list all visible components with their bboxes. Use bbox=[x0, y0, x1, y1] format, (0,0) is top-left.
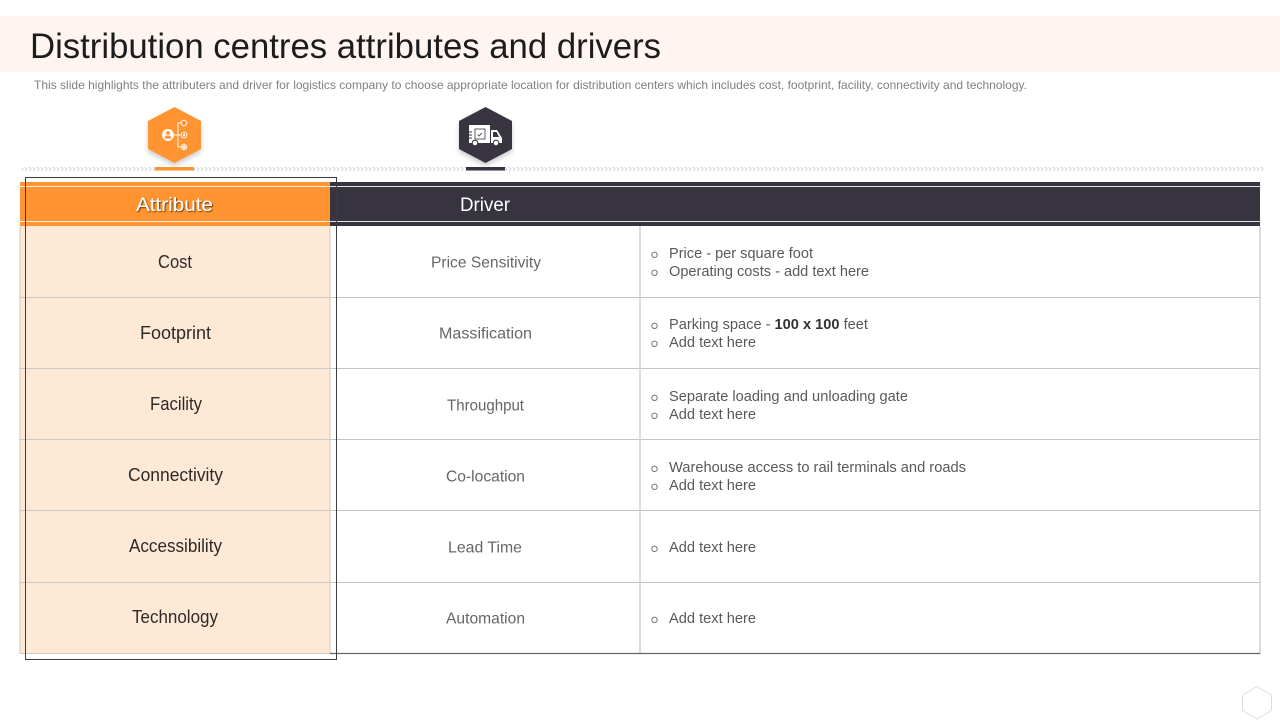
panel: attribute column bbox=[20, 226, 330, 654]
attribute: Facility: Facility bbox=[150, 394, 202, 414]
row: Accessibility bbox=[129, 536, 756, 556]
details: Connectivity: Warehouse access to rail terminals and roads bbox=[669, 460, 966, 476]
driver: Automation: Automation bbox=[446, 610, 525, 628]
row: Connectivity bbox=[128, 460, 966, 494]
details: Cost: Price - per square foot bbox=[669, 246, 813, 262]
icon: attribute hexagon bbox=[148, 107, 201, 163]
driver: Co-location: Co-location bbox=[446, 468, 525, 486]
header: Driver: Driver bbox=[460, 195, 511, 216]
details: Footprint bbox=[652, 317, 868, 351]
details: Cost bbox=[652, 246, 869, 280]
row: Facility bbox=[150, 389, 908, 423]
title band bbox=[0, 16, 1280, 72]
icon: driver hexagon with truck bbox=[459, 107, 512, 163]
details: Accessibility: Add text here bbox=[669, 540, 756, 556]
details: Connectivity: Add text here bbox=[669, 478, 756, 494]
details: Facility bbox=[652, 389, 908, 423]
details: Connectivity bbox=[652, 460, 966, 494]
icon: corner hexagon bbox=[1242, 686, 1272, 719]
attribute: Cost: Cost bbox=[158, 252, 192, 272]
row: Technology bbox=[132, 607, 756, 628]
attribute: Accessibility: Accessibility bbox=[129, 536, 222, 556]
details: Facility: Add text here bbox=[669, 407, 756, 423]
panel: driver table body bbox=[330, 226, 1260, 654]
row: Footprint bbox=[140, 317, 868, 351]
header: Attribute: Attribute bbox=[136, 195, 213, 216]
details: Technology: Add text here bbox=[669, 611, 756, 627]
driver marker bar bbox=[466, 167, 505, 170]
table header bbox=[20, 182, 1260, 226]
attribute: Connectivity: Connectivity bbox=[128, 465, 223, 485]
details: Footprint: Parking space - 100 x 100 feet bbox=[669, 317, 868, 333]
subtitle: This slide highlights the attributers and driver for logistics company to choose appropriate location for distribution centers which includes cost, footprint, facility, connectivity and technology. bbox=[34, 78, 1027, 92]
driver: Lead Time: Lead Time bbox=[448, 540, 522, 556]
attribute: Technology: Technology bbox=[132, 607, 218, 627]
row: Cost bbox=[158, 246, 869, 280]
driver: Price Sensitivity: Price Sensitivity bbox=[431, 254, 541, 272]
details: Cost: Operating costs - add text here bbox=[669, 264, 869, 280]
driver: Throughput: Throughput bbox=[447, 398, 525, 414]
details: Footprint: Add text here bbox=[669, 335, 756, 351]
attribute column outline bbox=[26, 178, 336, 660]
title: Distribution centres attributes and drivers bbox=[30, 27, 661, 66]
details: Facility: Separate loading and unloading gate bbox=[669, 389, 908, 405]
attribute: Footprint: Footprint bbox=[140, 323, 211, 343]
attribute marker bar bbox=[155, 167, 194, 170]
driver: Massification: Massification bbox=[439, 326, 532, 342]
